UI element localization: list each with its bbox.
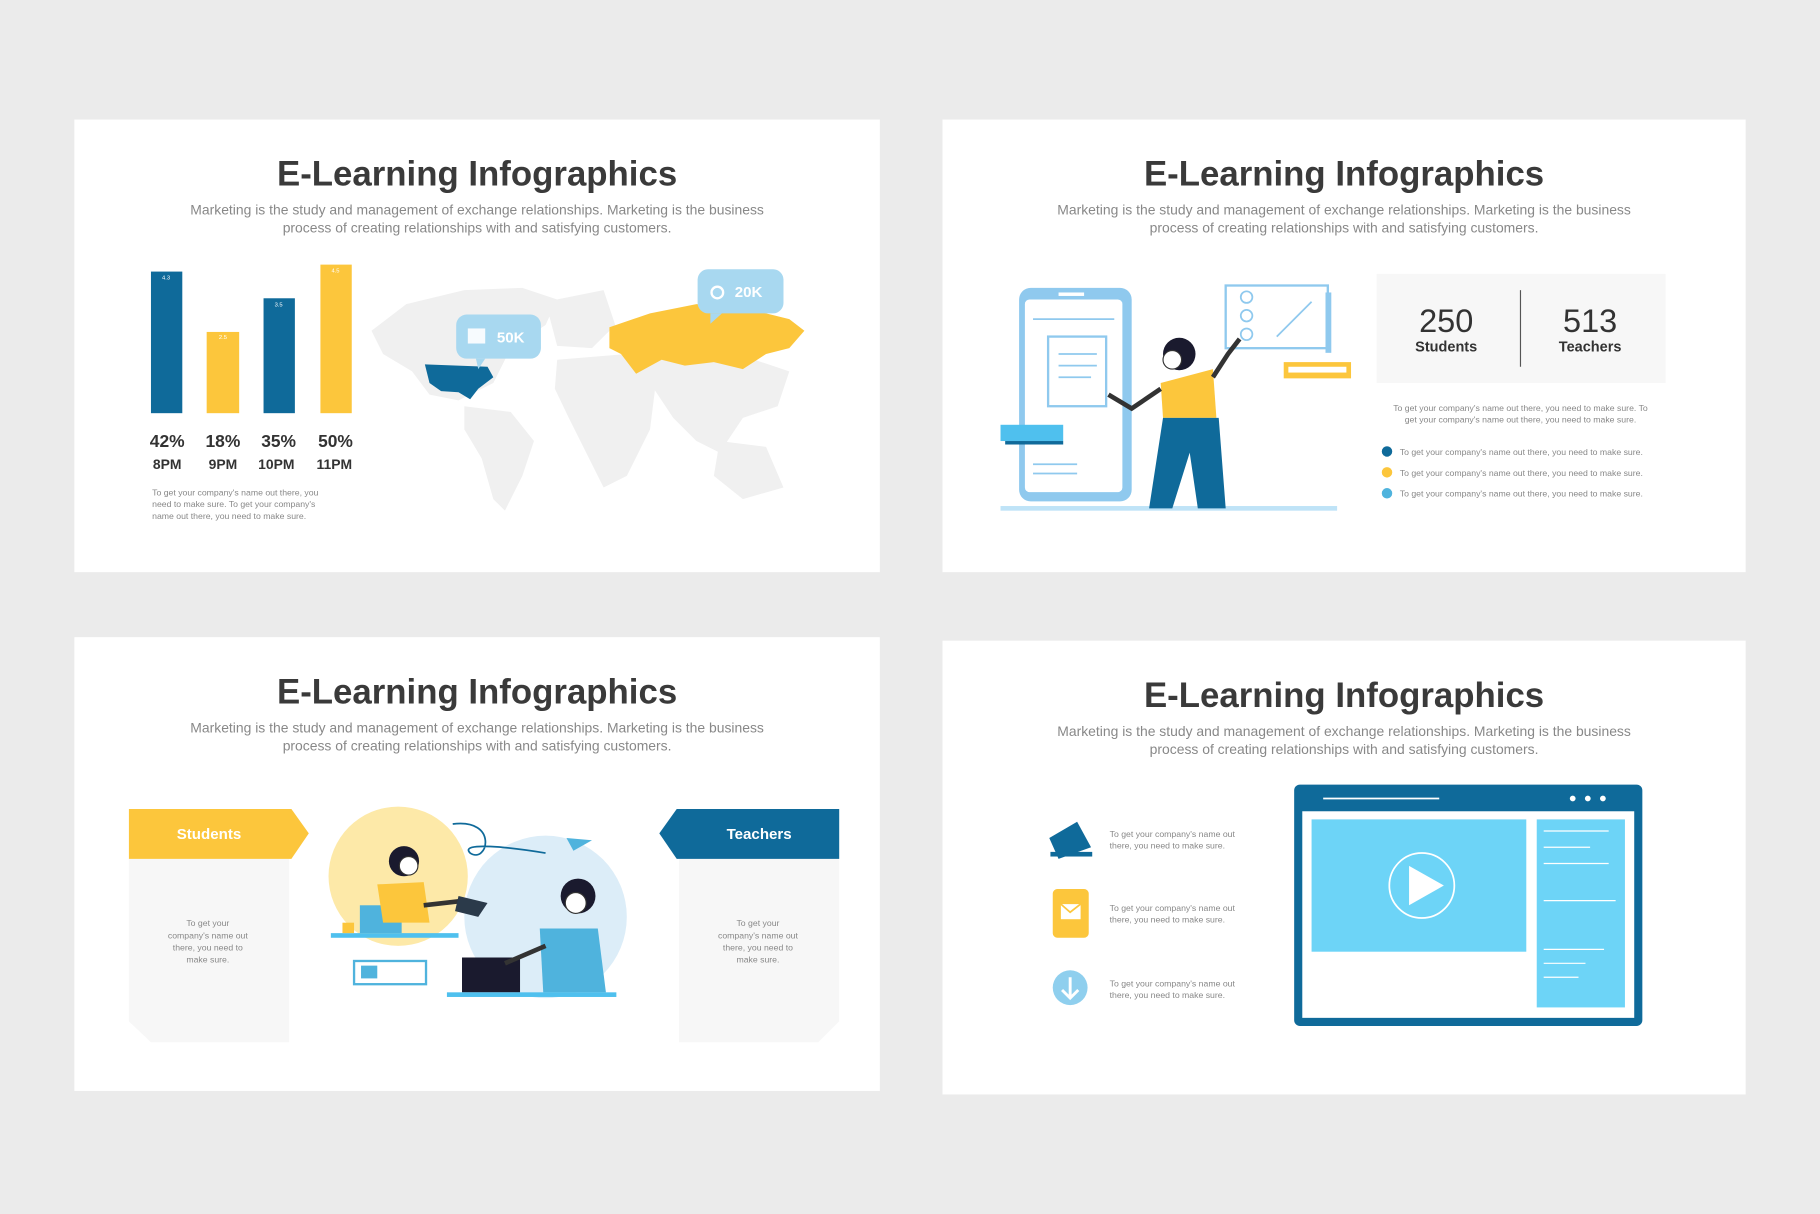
caption: need to make sure. To get your company's <box>152 499 316 509</box>
bar chart: 18% <box>206 431 240 451</box>
bar chart: 3.5 <box>275 302 283 308</box>
caption: name out there, you need to make sure. <box>152 511 306 521</box>
illustration: phone and person <box>1001 286 1351 511</box>
panel: bar chart and map <box>74 120 880 572</box>
panel: video <box>942 641 1746 1094</box>
title: E-Learning Infographics <box>1144 676 1544 715</box>
card: teachers: make sure. <box>736 955 779 965</box>
bar chart: 9PM <box>209 456 237 472</box>
caption: To get your company's name out there, you <box>152 488 319 498</box>
text: item 1: there, you need to make sure. <box>1110 840 1225 850</box>
bullet list <box>1382 446 1643 499</box>
bar chart <box>150 265 353 472</box>
text: item 3: To get your company's name out <box>1110 979 1235 989</box>
bullet list: To get your company's name out there, you need to make sure. <box>1400 468 1643 478</box>
callout 50K <box>456 315 541 369</box>
stats text: To get your company's name out there, you need to make sure. To <box>1393 403 1648 413</box>
subtitle: process of creating relationships with and satisfying customers. <box>1150 220 1538 236</box>
browser video player <box>1294 785 1642 1026</box>
title: E-Learning Infographics <box>1144 155 1544 194</box>
world map <box>371 269 804 511</box>
title: E-Learning Infographics <box>277 672 677 711</box>
text: item 2: To get your company's name out <box>1110 903 1235 913</box>
callout 20K <box>698 269 783 324</box>
text: item 3: there, you need to make sure. <box>1110 990 1225 1000</box>
card: teachers <box>659 809 839 1042</box>
stats text: get your company's name out there, you need to make sure. <box>1405 414 1636 424</box>
icon: envelope <box>1049 822 1092 859</box>
callout 50K: 50K <box>497 329 525 346</box>
card: teachers: Teachers <box>727 826 792 843</box>
bar chart: 42% <box>150 431 185 451</box>
card: students: To get your <box>186 918 229 928</box>
subtitle: process of creating relationships with and satisfying customers. <box>283 737 671 753</box>
bar chart: 35% <box>261 431 296 451</box>
Russia <box>609 304 804 374</box>
card: students: company's name out <box>168 930 248 940</box>
subtitle: Marketing is the study and management of exchange relationships. Marketing is the business <box>1057 202 1631 218</box>
subtitle: process of creating relationships with and satisfying customers. <box>283 220 671 236</box>
bar chart: 4.5 <box>331 269 340 275</box>
subtitle: process of creating relationships with and satisfying customers. <box>1150 741 1538 757</box>
callout 20K: 20K <box>735 284 763 301</box>
bar chart: 11PM <box>317 456 352 472</box>
card: students <box>129 809 309 1042</box>
panel: stats <box>942 120 1746 572</box>
text: item 1: To get your company's name out <box>1110 829 1235 839</box>
icon: download <box>1053 970 1088 1005</box>
bar chart: 10PM <box>258 456 294 472</box>
bar chart: 2.5 <box>219 335 227 341</box>
icon: tablet <box>1053 889 1089 938</box>
card: students: there, you need to <box>173 943 243 953</box>
card: teachers: company's name out <box>718 930 798 940</box>
stats box <box>1377 274 1666 383</box>
text: item 2: there, you need to make sure. <box>1110 915 1225 925</box>
title: E-Learning Infographics <box>277 155 677 194</box>
bar chart: 4.3 <box>162 276 170 282</box>
subtitle: Marketing is the study and management of exchange relationships. Marketing is the business <box>1057 723 1631 739</box>
subtitle: Marketing is the study and management of exchange relationships. Marketing is the business <box>190 719 764 735</box>
card: students: make sure. <box>186 955 229 965</box>
bullet list: To get your company's name out there, you need to make sure. <box>1400 489 1643 499</box>
card: teachers: To get your <box>736 918 780 928</box>
panel: students and teachers <box>74 637 880 1091</box>
stats box: 513 <box>1563 303 1617 339</box>
bar chart: 50% <box>318 431 353 451</box>
stats box: 250 <box>1419 303 1473 339</box>
USA <box>425 364 493 399</box>
illustration: online class <box>329 807 627 998</box>
stats box: Students <box>1415 340 1477 356</box>
card: teachers: there, you need to <box>723 943 793 953</box>
stats box: Teachers <box>1559 340 1621 356</box>
bullet list: To get your company's name out there, you need to make sure. <box>1400 447 1643 457</box>
card: students: Students <box>177 826 241 843</box>
bar chart: 8PM <box>153 456 182 472</box>
subtitle: Marketing is the study and management of exchange relationships. Marketing is the business <box>190 202 764 218</box>
